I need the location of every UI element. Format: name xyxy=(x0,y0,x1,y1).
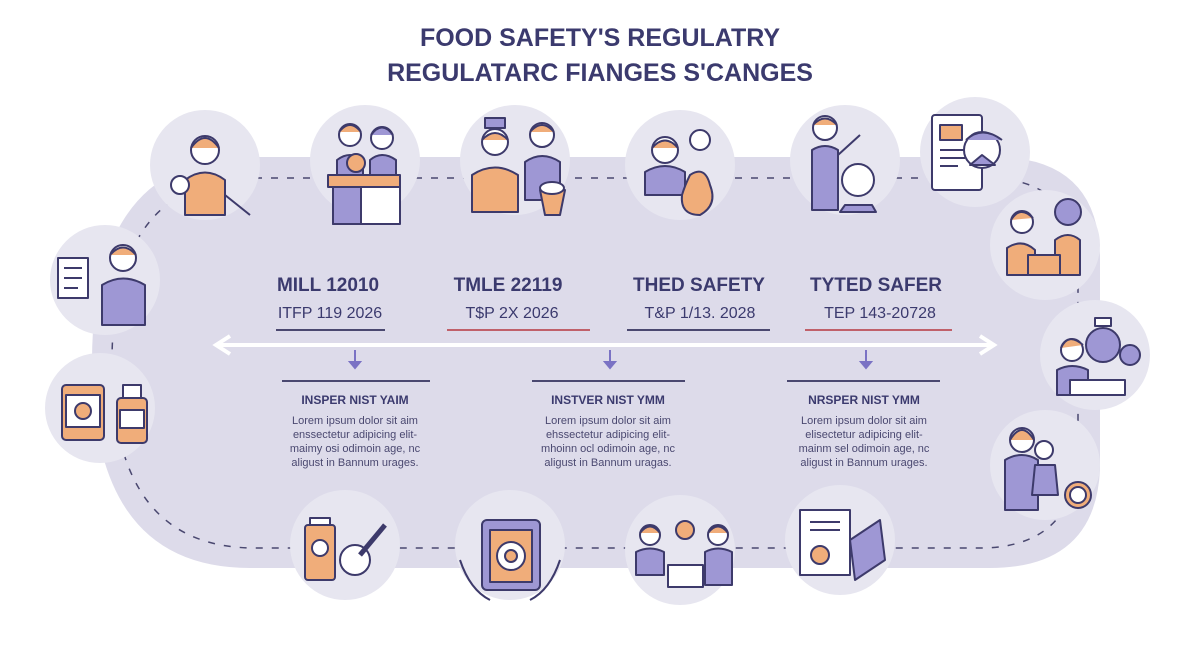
step text columns: aligust in Bannum urages. xyxy=(800,457,928,469)
step text columns: ehssectetur adipicing elit- xyxy=(546,429,670,441)
icon: hands and gear xyxy=(460,520,560,600)
icon: jars xyxy=(62,385,147,443)
icon: lab group xyxy=(1057,318,1140,395)
milestone headings: ITFP 119 2026 xyxy=(278,305,382,322)
icon: person with pear xyxy=(645,130,712,215)
step text columns: enssectetur adipicing elit- xyxy=(293,429,417,441)
underlines xyxy=(276,329,952,331)
milestone headings: MILL 12010 xyxy=(277,275,379,296)
step text columns: maimy osi odimoin age, nc xyxy=(290,443,421,455)
icon: two people with machine xyxy=(636,521,732,587)
icon: parent and child xyxy=(1005,428,1091,510)
step text columns: mainm sel odimoin age, nc xyxy=(799,443,930,455)
background blob xyxy=(92,157,1100,568)
title: REGULATARC FIANGES S'CANGES xyxy=(387,59,813,87)
icon: inspector with scale xyxy=(812,116,876,212)
milestone headings: T&P 1/13. 2028 xyxy=(645,305,756,322)
icon: family at counter xyxy=(328,124,400,224)
icon: checklist with hand xyxy=(800,510,885,580)
step text columns: INSTVER NIST YMM xyxy=(551,393,665,407)
icon: chef and man xyxy=(472,118,565,215)
milestone headings: TMLE 22119 xyxy=(454,275,562,296)
milestone headings: T$P 2X 2026 xyxy=(465,305,559,322)
icon: document and clock xyxy=(932,115,1002,190)
down arrows xyxy=(350,350,871,368)
step text columns: elisectetur adipicing elit- xyxy=(805,429,923,441)
step text columns: aligust in Bannum uragas. xyxy=(544,457,672,469)
timeline arrow xyxy=(216,336,994,354)
step text columns: Lorem ipsum dolor sit aim xyxy=(292,415,418,427)
icons: people figures xyxy=(58,115,1140,600)
icon circles xyxy=(45,97,1150,605)
title xyxy=(387,24,813,87)
milestone headings: THED SAFETY xyxy=(633,275,765,296)
step text columns: aligust in Bannum urages. xyxy=(291,457,419,469)
icon: person with checklist xyxy=(58,245,145,325)
step text columns: Lorem ipsum dolor sit aim xyxy=(545,415,671,427)
step text columns: Lorem ipsum dolor sit aim xyxy=(801,415,927,427)
title: FOOD SAFETY'S REGULATRY xyxy=(420,24,780,52)
icon: two people at counter xyxy=(1007,199,1081,275)
step text columns xyxy=(282,381,940,469)
step text columns: INSPER NIST YAIM xyxy=(301,393,409,407)
milestone headings xyxy=(277,275,942,322)
step text columns: mhoinn ocl odimoin age, nc xyxy=(541,443,675,455)
icon: person tasting xyxy=(171,136,250,215)
milestone headings: TEP 143-20728 xyxy=(824,305,936,322)
step text columns: NRSPER NIST YMM xyxy=(808,393,920,407)
icon: bottle and stamp xyxy=(305,518,385,580)
milestone headings: TYTED SAFER xyxy=(810,275,942,296)
